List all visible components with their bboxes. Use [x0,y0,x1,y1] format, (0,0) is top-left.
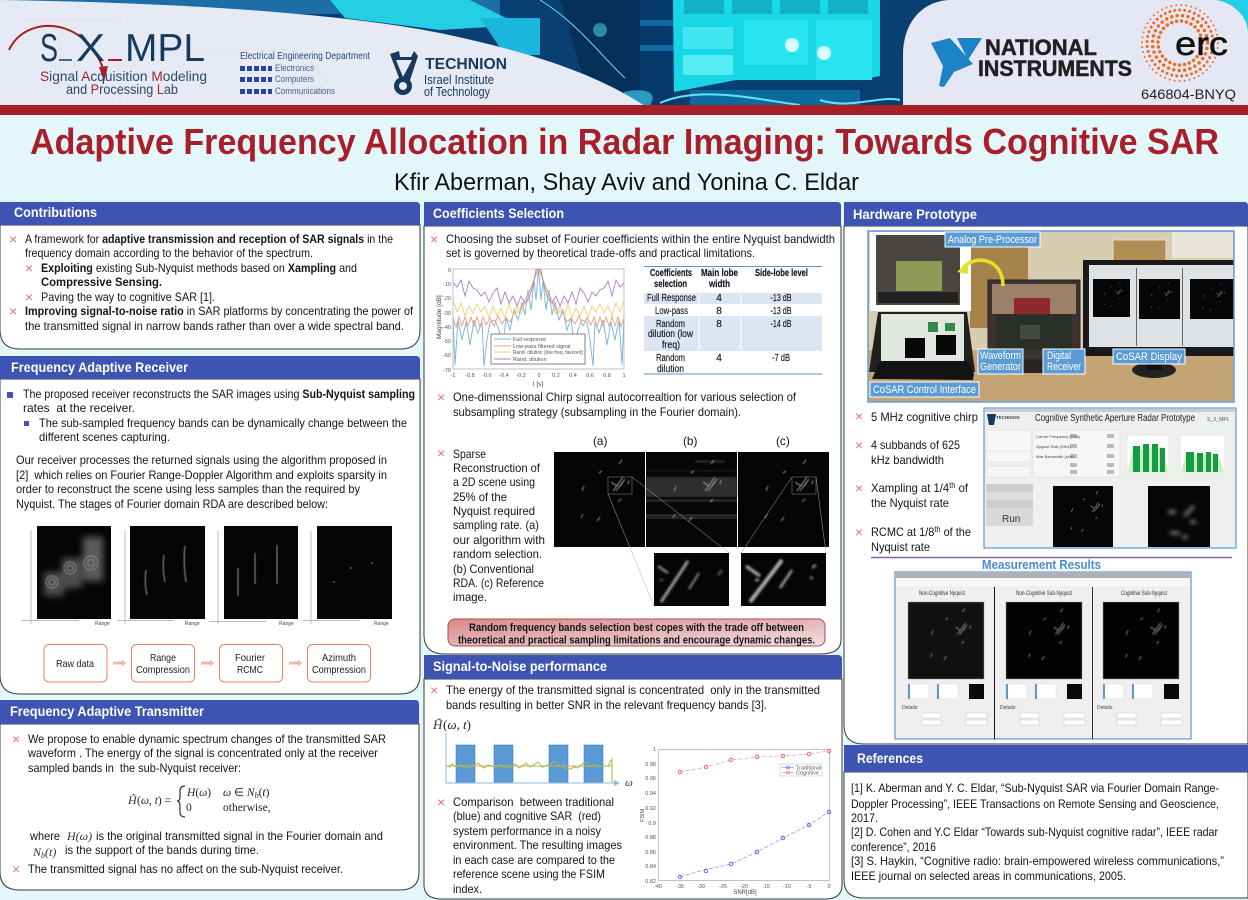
sparse reconstruction caption: sampling rate. (a) [453,518,539,532]
chart: chirp autocorrelation: -0.6 [482,373,492,379]
sparse reconstruction caption [437,445,545,604]
chart: FSIM vs SNR: 0.86 [645,850,656,856]
chart: chirp autocorrelation: -60 [443,353,451,359]
header banner [0,0,1248,106]
flow diagram: RDA stages: Raw data [56,658,94,670]
sparse reconstruction caption: 25% of the [453,490,507,504]
chart: chirp autocorrelation: 1 [622,373,626,379]
screenshot: measurement results: Non-Cognitive Nyquist [919,591,965,597]
chart: chirp autocorrelation: -70 [443,368,451,374]
contributions bullet list: × [25,260,33,276]
label: CoSAR display: CoSAR Display [1116,351,1182,363]
sparse reconstruction caption: our algorithm with [453,533,545,547]
receiver bullets: different scenes capturing. [39,430,170,444]
heading: hardware: Hardware Prototype [853,207,977,222]
table: coefficient comparison: Full Response [647,293,696,304]
screenshot: measurement results: Cognitive Sub-Nyquist [1121,591,1167,597]
axes for receiver images: Range [279,621,294,627]
prototype bullets: × [855,480,863,496]
prototype bullets: × [855,524,863,540]
heading: references: References [857,751,923,766]
chart: FSIM vs SNR: 0.98 [645,762,656,768]
contributions bullet list: × [25,289,33,305]
transmitter intro: waveform . The energy of the signal is concentrated only at the receiver [27,746,378,760]
transmitter explanation: is the support of the bands during time. [65,843,259,857]
comparison text: reference scene using the FSIM [453,867,605,881]
equation [127,786,271,817]
screenshot: prototype GUI: Max Bandwidth (kHz) [1036,454,1075,459]
contributions bullet list: × [9,303,17,319]
screenshot: measurement results: Details: [902,705,919,711]
flow diagram: RDA stages: Azimuth [322,652,356,664]
comparison text [437,794,622,896]
prototype bullets: Nyquist rate [871,540,930,554]
chart: chirp autocorrelation [436,268,626,388]
label: waveform generator [978,349,1023,374]
comparison text: index. [453,882,482,896]
zoomed reconstruction [654,553,729,606]
transmitter explanation [12,829,383,877]
logo: National Instruments: INSTRUMENTS [978,56,1132,81]
chart: chirp autocorrelation: Low-pass filtered signal [513,344,570,350]
transmitter explanation: × [12,861,20,877]
sparse reconstruction caption: × [437,445,445,461]
chart: FSIM vs SNR: 0.96 [645,776,656,782]
chart: chirp autocorrelation: -0.4 [499,373,509,379]
chart: FSIM vs SNR: 0.88 [645,835,656,841]
transmitter explanation: is the original transmitted signal in the Fourier domain and [96,829,383,843]
chart: chirp autocorrelation: 0.4 [569,373,577,379]
table: coefficient comparison [644,266,822,375]
chart: chirp autocorrelation: Magnitude [dB] [436,295,443,339]
prototype bullets: kHz bandwidth [871,453,944,467]
equation: b [255,791,259,800]
heading: coefficients: Coefficients Selection [433,206,564,221]
label: analog pre-processor: Analog Pre-Processor [948,234,1037,246]
table: coefficient comparison: Side-lobe level [755,268,808,279]
SNR intro: × [430,682,438,698]
chart: FSIM vs SNR: 0.92 [645,806,656,812]
screenshot: measurement results [895,572,1191,739]
receiver description: Nyquist. The stages of Fourier domain RDA are described below: [16,497,328,511]
transmitter explanation: H(ω) [66,829,92,843]
logo: Technion: Israel Institute [424,73,494,87]
transmitter explanation: N [33,845,41,859]
photo: hardware setup [868,231,1234,402]
chart: FSIM vs SNR: FSIM [640,808,646,822]
monitor in banner [673,0,880,92]
callout: random band selection [448,619,825,646]
chart: chirp autocorrelation: 0 [537,373,541,379]
heading: SNR: Signal-to-Noise performance [433,659,607,674]
table: coefficient comparison: -13 dB [770,293,792,304]
GUI spectra [1127,435,1225,472]
logo: Technion [390,51,507,99]
sparse reconstruction caption: Sparse [453,447,486,461]
zoomed reference [741,553,826,606]
axes for receiver images: Range [95,621,110,627]
flow diagram: RDA stages: Range [150,652,176,664]
screenshot: prototype GUI: Carrier Frequency (GHz) [1036,434,1081,439]
axes for receiver images: Range [374,621,389,627]
comparison text: environment. The resulting images [453,838,622,852]
chart: chirp autocorrelation: -1 [451,373,455,379]
prototype bullets: of the [941,525,971,539]
heading: receiver: Frequency Adaptive Receiver [11,360,189,375]
reference list: IEEE journal on selected areas in communications, 2005. [851,869,1126,883]
chart: FSIM vs SNR: 0.84 [645,864,656,870]
flow diagram: RDA stages: Compression [312,664,366,676]
screenshot: measurement results: Non-Cognitive Sub-Nyquist [1016,591,1072,597]
SNR intro: bands resulting in better SNR in the relevant frequency bands [3]. [446,698,767,712]
chart: FSIM vs SNR: -10 [783,884,791,890]
chart: FSIM vs SNR: 0.94 [645,791,656,797]
prototype bullets: the Nyquist rate [871,496,949,510]
sparse reconstruction caption: Nyquist required [453,504,535,518]
chart: FSIM vs SNR: -35 [676,884,684,890]
equation: 0 [186,802,192,814]
chart: FSIM vs SNR: 0.82 [645,879,656,885]
prototype bullets: RCMC at 1/8 [871,525,939,539]
chirp caption [437,389,797,419]
equation: ( [259,787,263,799]
logo: SAMPL lab [9,26,207,97]
SNR intro: The energy of the transmitted signal is concentrated only in the transmitted [446,683,820,697]
sparse reconstruction caption: RDA. (c) Reference [453,576,544,590]
table: coefficient comparison: 4 [716,293,722,304]
prototype bullets: × [855,408,863,424]
chart: chirp autocorrelation: 0.2 [552,373,560,379]
sparse reconstruction caption: a 2D scene using [453,475,535,489]
transmitter explanation: b [41,851,45,860]
chart: FSIM vs SNR: 0 [827,884,831,890]
receiver bullets [7,387,415,444]
screenshot: prototype GUI: Run [1002,514,1020,525]
comparison text: × [437,794,445,810]
figure: reconstruction comparison [554,434,829,606]
reference list: [3] S. Haykin, “Cognitive radio: brain-empowered wireless communications,” [851,854,1224,868]
logo: electrical engineering department: Communications [275,86,335,97]
chart: transmitted bands: H̃ [432,717,443,732]
label: digital receiver: Receiver [1047,361,1081,373]
chart: FSIM vs SNR: Cognitive [796,770,819,776]
equation: (ω, t) = [137,795,171,807]
label: waveform generator: Waveform [980,350,1021,362]
panel: coefficients selection [424,202,841,654]
figure: reconstruction comparison: (a) [593,434,607,448]
chart: FSIM vs SNR: 0.9 [648,821,656,827]
receiver bullets: The sub-sampled frequency bands can be dynamically change between the [39,416,407,430]
chirp caption: subsampling strategy (subsampling in the Fourier domain). [453,405,741,419]
equation: H̃ [127,793,138,807]
figure: reconstruction comparison: (b) [683,434,697,448]
chart: FSIM vs SNR: -30 [697,884,705,890]
label: waveform generator: Generator [980,361,1021,373]
screenshot: prototype GUI: S_X_MPL [1207,417,1230,423]
sparse reconstruction caption: Reconstruction of [453,461,541,475]
contributions bullet list [9,231,414,333]
receiver bullets: rates at the receiver. [23,401,135,415]
reference list: [1] K. Aberman and Y. C. Eldar, “Sub-Nyquist SAR via Fourier Domain Range- [851,781,1219,795]
logo: electrical engineering department: Electronics [275,63,314,74]
chart: chirp autocorrelation: -40 [443,325,451,331]
chart: chirp autocorrelation: -0.8 [465,373,475,379]
label: analog pre-processor [945,232,1040,247]
logo: National Instruments: NATIONAL [985,35,1097,60]
contributions bullet list: A framework for adaptive transmission and reception of SAR signals in the [25,232,393,246]
equation: ω ∈ N [223,787,255,799]
reference list [851,781,1224,883]
chart: chirp autocorrelation: 0.6 [586,373,594,379]
table: coefficient comparison: 8 [716,319,722,330]
red divider bar [0,105,1248,115]
image: azimuth compression [317,526,392,619]
transmitter explanation: (t) [45,845,56,859]
contributions bullet list: × [9,231,17,247]
coefficients intro: Choosing the subset of Fourier coefficients within the entire Nyquist bandwidth [446,232,835,246]
equation: t) [262,787,269,799]
equation: otherwise, [223,802,271,814]
table: coefficient comparison: dilution (low [648,329,694,340]
chart: FSIM vs SNR: -20 [740,884,748,890]
prototype bullets: th [949,481,955,490]
logo: ERC [1141,5,1236,102]
chart: FSIM vs SNR: SNR[dB] [733,890,757,896]
table: coefficient comparison: Random [656,319,685,330]
prototype bullets: of [955,481,969,495]
heading: transmitter: Frequency Adaptive Transmitter [10,704,205,719]
comparison text: system performance in a noisy [453,824,601,838]
logo: National Instruments [931,35,1132,87]
transmitter intro [12,731,386,775]
flow diagram: RDA stages [44,644,370,682]
table: coefficient comparison: -7 dB [772,353,790,364]
comparison text: (blue) and cognitive SAR (red) [453,809,601,823]
receiver description: [2] which relies on Fourier Range-Doppler Algorithm and exploits sparsity in [16,468,387,482]
flow diagram: RDA stages: Compression [136,664,190,676]
logo: SAMPL lab: and Processing Lab [66,82,178,97]
screenshot: prototype GUI: Cognitive Synthetic Aperture Radar Prototype [1035,413,1195,424]
chart: FSIM vs SNR: -40 [654,884,662,890]
chart: FSIM vs SNR: -5 [807,884,811,890]
comparison text: Comparison between traditional [453,795,614,809]
prototype bullets: Xampling at 1/4 [871,481,953,495]
panel: frequency adaptive transmitter [0,700,419,890]
chart: transmitted bands: (ω, t) [443,717,471,732]
screenshot: prototype GUI: TECHNION [996,415,1020,420]
chart: chirp autocorrelation: -50 [443,339,451,345]
chart: chirp autocorrelation: -20 [443,296,451,302]
sparse reconstruction caption: (b) Conventional [453,562,534,576]
chart: chirp autocorrelation: -0.2 [516,373,526,379]
panel: references [844,745,1248,898]
table: coefficient comparison: Main lobe [701,268,738,279]
sparse reconstruction caption: random selection. [453,547,542,561]
receiver description: order to reconstruct the scene using less samples than the required by [16,482,360,496]
panel: hardware prototype [844,202,1248,744]
prototype bullets: 4 subbands of 625 [871,438,960,452]
chart: FSIM vs SNR: -25 [719,884,727,890]
chart: chirp autocorrelation: -10 [443,282,451,288]
label: digital receiver: Digital [1047,350,1071,362]
image: raw data [37,526,111,619]
contributions bullet list: Improving signal-to-noise ratio in SAR platforms by concentrating the power of [25,304,414,318]
logo: SAMPL lab: S [40,27,58,70]
chart: FSIM vs SNR: Traditional [796,766,821,772]
chart: chirp autocorrelation: 0.8 [603,373,611,379]
coefficients intro: set is governed by theoretical trade-offs and practical limitations. [446,246,755,260]
table: coefficient comparison: freq) [662,340,680,351]
table: coefficient comparison: 4 [716,353,722,364]
axes for receiver images [22,530,389,627]
chart: transmitted bands [432,717,633,789]
prototype bullets: 5 MHz cognitive chirp [871,410,978,424]
transmitter intro: sampled bands in the sub-Nyquist receiver: [28,761,241,775]
chart: chirp autocorrelation: t [s] [533,381,543,388]
divider line [871,556,1232,558]
contributions bullet list: frequency domain according to the behavior of the spectrum. [25,246,313,260]
label: digital receiver [1043,349,1085,374]
panel: frequency adaptive receiver [0,356,420,694]
receiver bullets: The proposed receiver reconstructs the SAR images using Sub-Nyquist sampling [23,387,415,401]
chirp caption: One-dimenssional Chirp signal autocorrealtion for various selection of [453,390,797,404]
panel: contributions [0,202,420,349]
heading: measurement results: Measurement Results [982,558,1101,572]
table: coefficient comparison: dilution [657,364,684,375]
table: coefficient comparison: 8 [716,306,722,317]
logo: Technion: of Technology [424,85,491,99]
panel: signal-to-noise performance [424,655,842,899]
table: coefficient comparison: width [708,279,730,290]
chart: chirp autocorrelation: Rand. dilution [513,357,547,363]
chart: chirp autocorrelation: -30 [443,311,451,317]
receiver description: Our receiver processes the returned signals using the algorithm proposed in [16,453,387,467]
reference list: Doppler Processing”, IEEE Transactions on Remote Sensing and Geoscience, [851,797,1219,811]
logo: SAMPL lab: X [76,27,105,70]
image: Fourier RCMC [224,526,298,619]
logo: electrical engineering department [240,50,370,97]
screenshot: measurement results: Details: [1000,705,1017,711]
table: coefficient comparison: Random [656,353,685,364]
table: coefficient comparison: Coefficients [650,268,692,279]
table: coefficient comparison: -14 dB [770,319,792,330]
equation: H(ω) [186,787,211,799]
chart: chirp autocorrelation: Full response [513,337,546,343]
coefficients intro [430,231,835,260]
contributions bullet list: the transmitted signal in narrow bands rather than over a wide spectral band. [25,319,404,333]
chirp caption: × [437,389,445,405]
heading: contributions: Contributions [14,205,97,220]
figure: reconstruction comparison: (c) [776,434,790,448]
table: coefficient comparison: Low-pass [655,306,688,317]
logo: ERC: 646804-BNYQ [1141,86,1236,102]
contributions bullet list: Compressive Sensing. [41,275,162,289]
table: coefficient comparison: -13 dB [770,306,792,317]
contributions bullet list: Paving the way to cognitive SAR [1]. [41,290,215,304]
prototype bullets: × [855,437,863,453]
prototype bullets [855,408,978,554]
screenshot: measurement results: Details: [1097,705,1114,711]
flow diagram: RDA stages: RCMC [237,664,263,676]
logo: electrical engineering department: Computers [275,74,314,85]
reference list: [2] D. Cohen and Y.C Eldar “Towards sub-Nyquist cognitive radar”, IEEE radar [851,825,1218,839]
callout: random band selection: Random frequency bands selection best copes with the trade off between [469,622,804,634]
logo: ERC: erc [1175,25,1228,62]
SNR intro [430,682,820,712]
logo: SAMPL lab: Signal Acquisition Modeling [40,69,207,84]
transmitter intro: We propose to enable dynamic spectrum changes of the transmitted SAR [28,732,386,746]
label: CoSAR control interface: CoSAR Control Interface [873,384,976,396]
transmitter explanation: where [29,829,60,843]
chart: chirp autocorrelation: 0 [448,268,451,274]
screenshot: prototype GUI: Nyquist Rate (MHz) [1036,444,1072,449]
screenshot: prototype GUI [984,408,1236,548]
image: range compression [130,526,205,619]
chart: FSIM vs SNR [640,747,831,896]
logo: SAMPL lab: MPL [125,27,205,70]
sparse reconstruction caption: image. [453,590,487,604]
coefficients intro: × [430,231,438,247]
axes for receiver images: Range [185,621,200,627]
flow diagram: RDA stages: Fourier [235,652,265,664]
chart: transmitted bands: ω [625,777,633,789]
prototype bullets: th [934,525,941,534]
logo: electrical engineering department: Electrical Engineering Department [240,50,370,62]
logo: Technion: TECHNION [425,56,507,73]
callout: random band selection: theoretical and practical sampling limitations and encourage dynamic changes. [458,634,815,646]
table: coefficient comparison: selection [654,279,687,290]
reference list: conference”, 2016 [851,840,936,854]
reference list: 2017. [851,811,878,825]
contributions bullet list: Exploiting existing Sub-Nyquist methods based on Xampling and [41,261,357,275]
transmitter intro: × [12,731,20,747]
chart: chirp autocorrelation: Rand. dilution (low freq. favored) [513,350,583,356]
chart: FSIM vs SNR: 1 [653,747,656,753]
transmitter explanation: The transmitted signal has no affect on the sub-Nyquist receiver. [28,862,343,876]
comparison text: in each case are compared to the [453,853,615,867]
authors: Kfir Aberman, Shay Aviv and Yonina C. Eldar [394,169,859,196]
receiver description [16,453,387,511]
chart: FSIM vs SNR: -15 [762,884,770,890]
